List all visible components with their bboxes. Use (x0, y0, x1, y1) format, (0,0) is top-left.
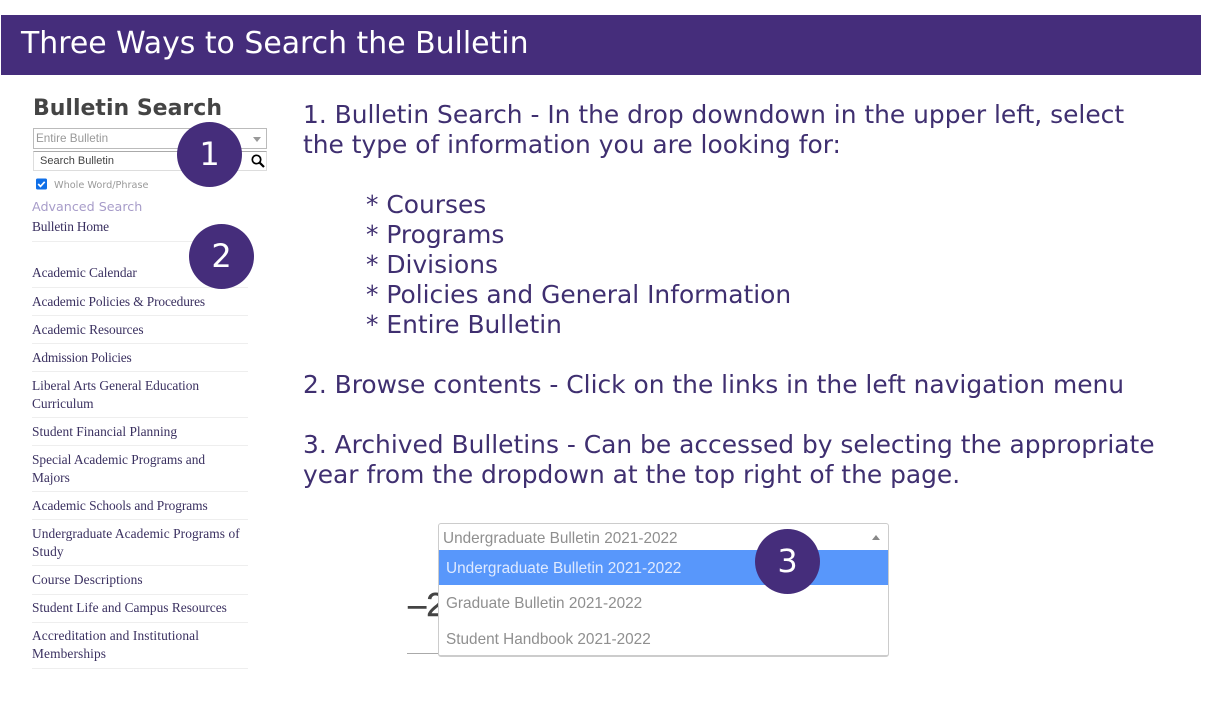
badge 1 (177, 122, 242, 187)
option: handbook: Student Handbook 2021-2022 (446, 631, 651, 648)
instructions text: 1. Bulletin Search - In the drop downdown in the upper left, select (303, 100, 1124, 129)
background fragment: page title digit: –2 (408, 586, 445, 623)
highlighted option: Undergraduate Bulletin 2021-2022 (446, 560, 681, 577)
instructions text: * Entire Bulletin (366, 310, 562, 339)
navigation menu: Undergraduate Academic Programs of (32, 526, 240, 541)
navigation menu: Bulletin Home (32, 219, 109, 234)
year dropdown (438, 523, 889, 657)
instructions text: * Divisions (366, 250, 498, 279)
title banner: Three Ways to Search the Bulletin (21, 26, 529, 61)
badge 2 (189, 224, 254, 289)
icon: up arrow (872, 535, 880, 540)
option: graduate: Graduate Bulletin 2021-2022 (446, 595, 642, 612)
instructions text: * Programs (366, 220, 504, 249)
badge 1: 1 (199, 135, 220, 173)
title banner (1, 15, 1201, 75)
navigation menu: Student Life and Campus Resources (32, 600, 227, 615)
badge 3: 3 (777, 542, 798, 580)
heading: Bulletin Search: Bulletin Search (33, 96, 222, 121)
highlighted option (439, 550, 888, 585)
navigation menu: Academic Policies & Procedures (32, 294, 205, 309)
checkbox label: Whole Word/Phrase (54, 180, 148, 191)
instructions text: 2. Browse contents - Click on the links in the left navigation menu (303, 370, 1124, 399)
instructions text: 3. Archived Bulletins - Can be accessed by selecting the appropriate (303, 430, 1155, 459)
dropdown current value: Undergraduate Bulletin 2021-2022 (443, 530, 678, 547)
instructions text (303, 100, 1155, 489)
navigation menu: Student Financial Planning (32, 424, 177, 439)
navigation menu: Academic Calendar (32, 265, 137, 280)
navigation menu: Curriculum (32, 396, 94, 411)
icon: magnifier (252, 154, 265, 168)
dropdown: Entire Bulletin (33, 128, 267, 149)
instructions text: * Policies and General Information (366, 280, 791, 309)
navigation menu: Academic Schools and Programs (32, 498, 208, 513)
instructions text: the type of information you are looking for: (303, 130, 841, 159)
search input: Search Bulletin (40, 155, 114, 167)
navigation menu: Academic Resources (32, 322, 144, 337)
icon: dropdown arrow (253, 137, 261, 142)
instructions text: year from the dropdown at the top right of the page. (303, 460, 960, 489)
link: Advanced Search: Advanced Search (32, 199, 142, 214)
navigation menu (32, 219, 248, 669)
instructions text: * Courses (366, 190, 486, 219)
navigation menu: Memberships (32, 646, 106, 661)
navigation menu: Special Academic Programs and (32, 452, 205, 467)
navigation menu: Liberal Arts General Education (32, 378, 199, 393)
navigation menu: Majors (32, 470, 70, 485)
checkbox (36, 178, 47, 190)
navigation menu: Study (32, 544, 64, 559)
search input (33, 151, 267, 171)
badge 3 (755, 529, 820, 594)
background underline (407, 653, 441, 654)
navigation menu: Course Descriptions (32, 572, 143, 587)
navigation menu: Admission Policies (32, 350, 131, 365)
navigation menu: Accreditation and Institutional (32, 628, 199, 643)
dropdown: Entire Bulletin: Entire Bulletin (36, 132, 108, 145)
badge 2: 2 (211, 237, 232, 275)
